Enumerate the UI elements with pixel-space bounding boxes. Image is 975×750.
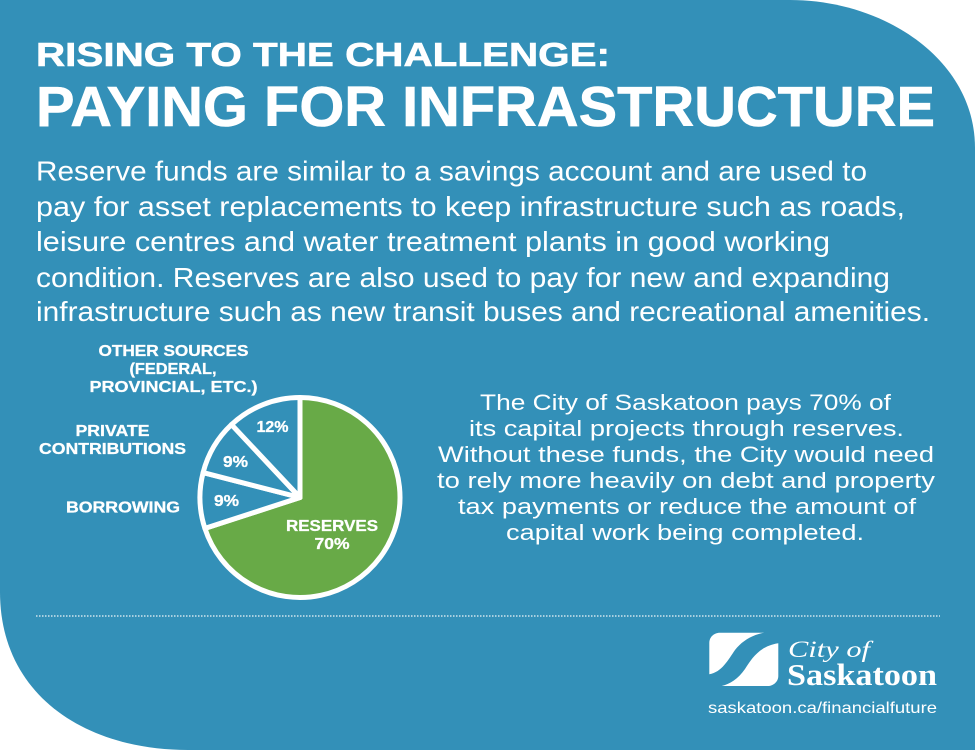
label: other sources: OTHER SOURCES bbox=[98, 343, 248, 360]
text block: city of saskatoon explanation: Without these funds, the City would need bbox=[438, 442, 934, 467]
label: private contributions: CONTRIBUTIONS bbox=[39, 441, 186, 458]
pie chart bbox=[200, 398, 400, 598]
text block: city of saskatoon explanation: tax payments or reduce the amount of bbox=[458, 494, 917, 519]
text block: city of saskatoon explanation: to rely more heavily on debt and property bbox=[437, 468, 935, 493]
value: reserves 70%: 70% bbox=[314, 536, 350, 553]
label: private contributions bbox=[39, 423, 186, 458]
label: borrowing: BORROWING bbox=[66, 500, 180, 516]
value: reserves 70% bbox=[286, 518, 378, 553]
value: 12%: 12% bbox=[256, 419, 289, 436]
value: 9% private: 9% bbox=[223, 454, 248, 471]
text block: reserve funds description: leisure centres and water treatment plants in good working bbox=[36, 226, 830, 257]
website url: saskatoon.ca/financialfuture bbox=[708, 700, 937, 717]
wordmark: saskatoon: Saskatoon bbox=[787, 657, 937, 692]
text block: reserve funds description: pay for asset replacements to keep infrastructure such as roads, bbox=[36, 191, 905, 222]
text block: reserve funds description: infrastructure such as new transit buses and recreational amenities. bbox=[36, 296, 930, 327]
wordmark: city of: City of bbox=[788, 637, 875, 662]
slice: other sources 12% bbox=[232, 398, 300, 498]
text block: city of saskatoon explanation: its capital projects through reserves. bbox=[469, 416, 904, 441]
title bbox=[36, 36, 935, 139]
icon: saskatoon river mark bbox=[709, 633, 778, 686]
text block: reserve funds description bbox=[36, 156, 930, 327]
text block: reserve funds description: Reserve funds are similar to a savings account and are used to bbox=[36, 156, 867, 186]
label: private contributions: PRIVATE bbox=[76, 423, 150, 440]
value: reserves 70%: RESERVES bbox=[286, 518, 378, 535]
text block: city of saskatoon explanation: The City of Saskatoon pays 70% of bbox=[480, 390, 892, 415]
heading: rising to the challenge: RISING TO THE CHALLENGE: bbox=[36, 36, 610, 73]
pie labels bbox=[39, 343, 378, 553]
slice: reserves 70% bbox=[205, 398, 400, 598]
text block: reserve funds description: condition. Reserves are also used to pay for new and expanding bbox=[36, 262, 890, 293]
slice: private contributions 9% bbox=[203, 425, 300, 498]
logo: city of saskatoon bbox=[709, 633, 937, 692]
value: 9% borrowing: 9% bbox=[214, 493, 239, 510]
label: other sources: (FEDERAL, bbox=[130, 361, 216, 378]
heading: paying for infrastructure: PAYING FOR INFRASTRUCTURE bbox=[36, 75, 935, 139]
slice: borrowing 9% bbox=[200, 473, 300, 528]
label: other sources: PROVINCIAL, ETC.) bbox=[90, 379, 258, 396]
text block: city of saskatoon explanation: capital work being completed. bbox=[506, 520, 864, 545]
text block: city of saskatoon explanation bbox=[437, 390, 935, 545]
label: other sources bbox=[90, 343, 258, 396]
